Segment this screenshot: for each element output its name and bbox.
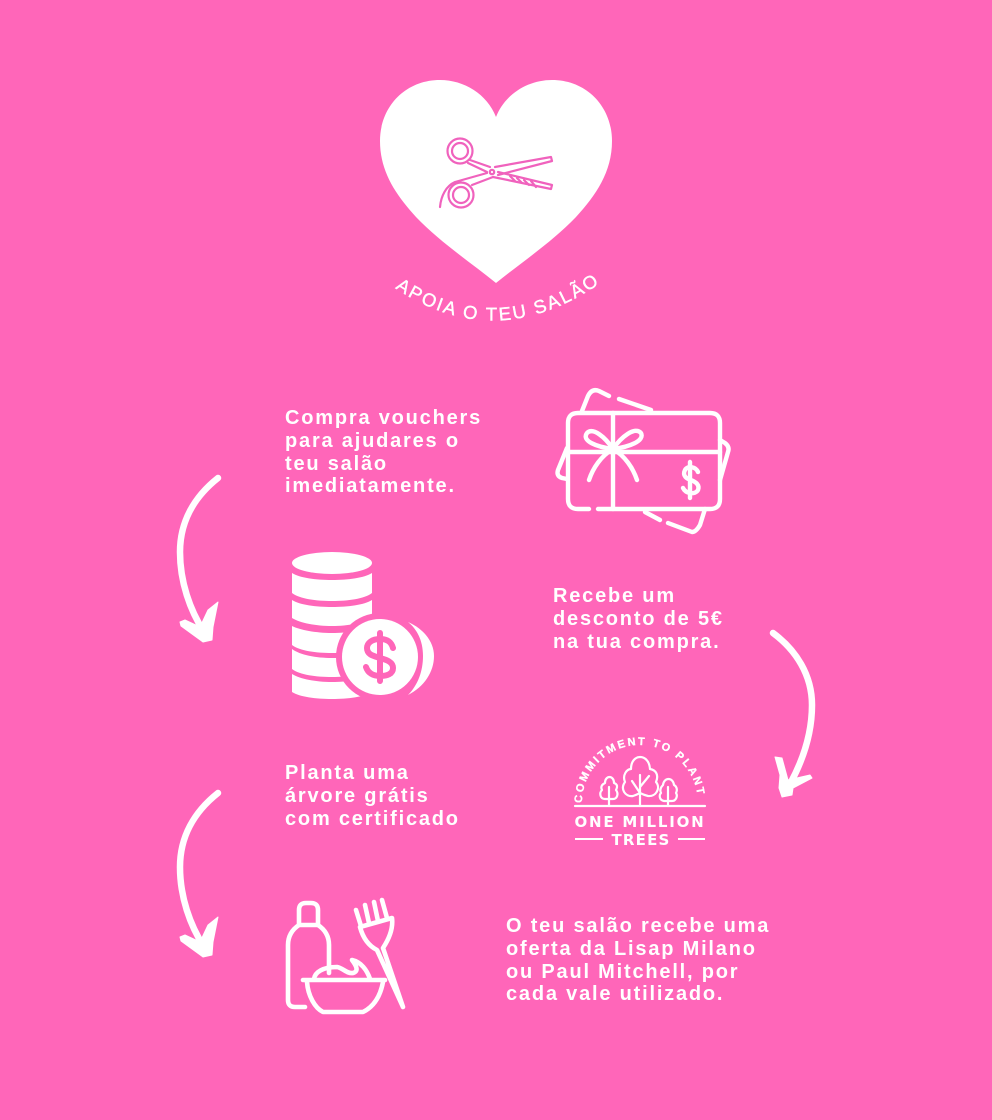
text: step three: com certificado [285,808,460,830]
badge: commitment to plant, one million trees [574,737,706,849]
icon: heart with scissors: APOIA O TEU SALÃO [394,276,597,321]
text: step two: na tua compra. [553,631,720,653]
text: step two: Recebe um [553,585,676,607]
trees [575,757,705,806]
text: step four: cada vale utilizado. [506,983,724,1005]
icon: gift voucher card [555,388,731,534]
arrow: certificate to offer [176,790,222,958]
heart shape [380,80,612,283]
arrow: discount to trees [770,630,816,798]
text: step three: Planta uma [285,762,410,784]
text: step two [553,585,724,653]
text: step one [285,407,482,497]
badge subtitle: TREES [611,831,671,849]
curved caption [395,282,602,321]
text: step four: ou Paul Mitchell, por [506,961,739,983]
badge title: ONE MILLION [574,813,706,831]
text: step one: imediatamente. [285,475,456,497]
text: step one: Compra vouchers [285,407,482,429]
text: step four [506,915,770,1005]
text: step one: para ajudares o [285,430,460,452]
icon: scissors [440,138,552,208]
icon: coin stack [292,552,434,699]
text: step four: oferta da Lisap Milano [506,938,757,960]
icon: hair products [286,898,406,1014]
badge arc text: COMMITMENT TO PLANT [574,737,705,802]
text: step one: teu salão [285,453,388,475]
text: step two: desconto de 5€ [553,608,724,630]
icon: heart with scissors [380,80,612,321]
text: step four: O teu salão recebe uma [506,915,770,937]
arrow: voucher to coins [176,474,222,642]
text: step three: árvore grátis [285,785,430,807]
text: step three [285,762,460,830]
